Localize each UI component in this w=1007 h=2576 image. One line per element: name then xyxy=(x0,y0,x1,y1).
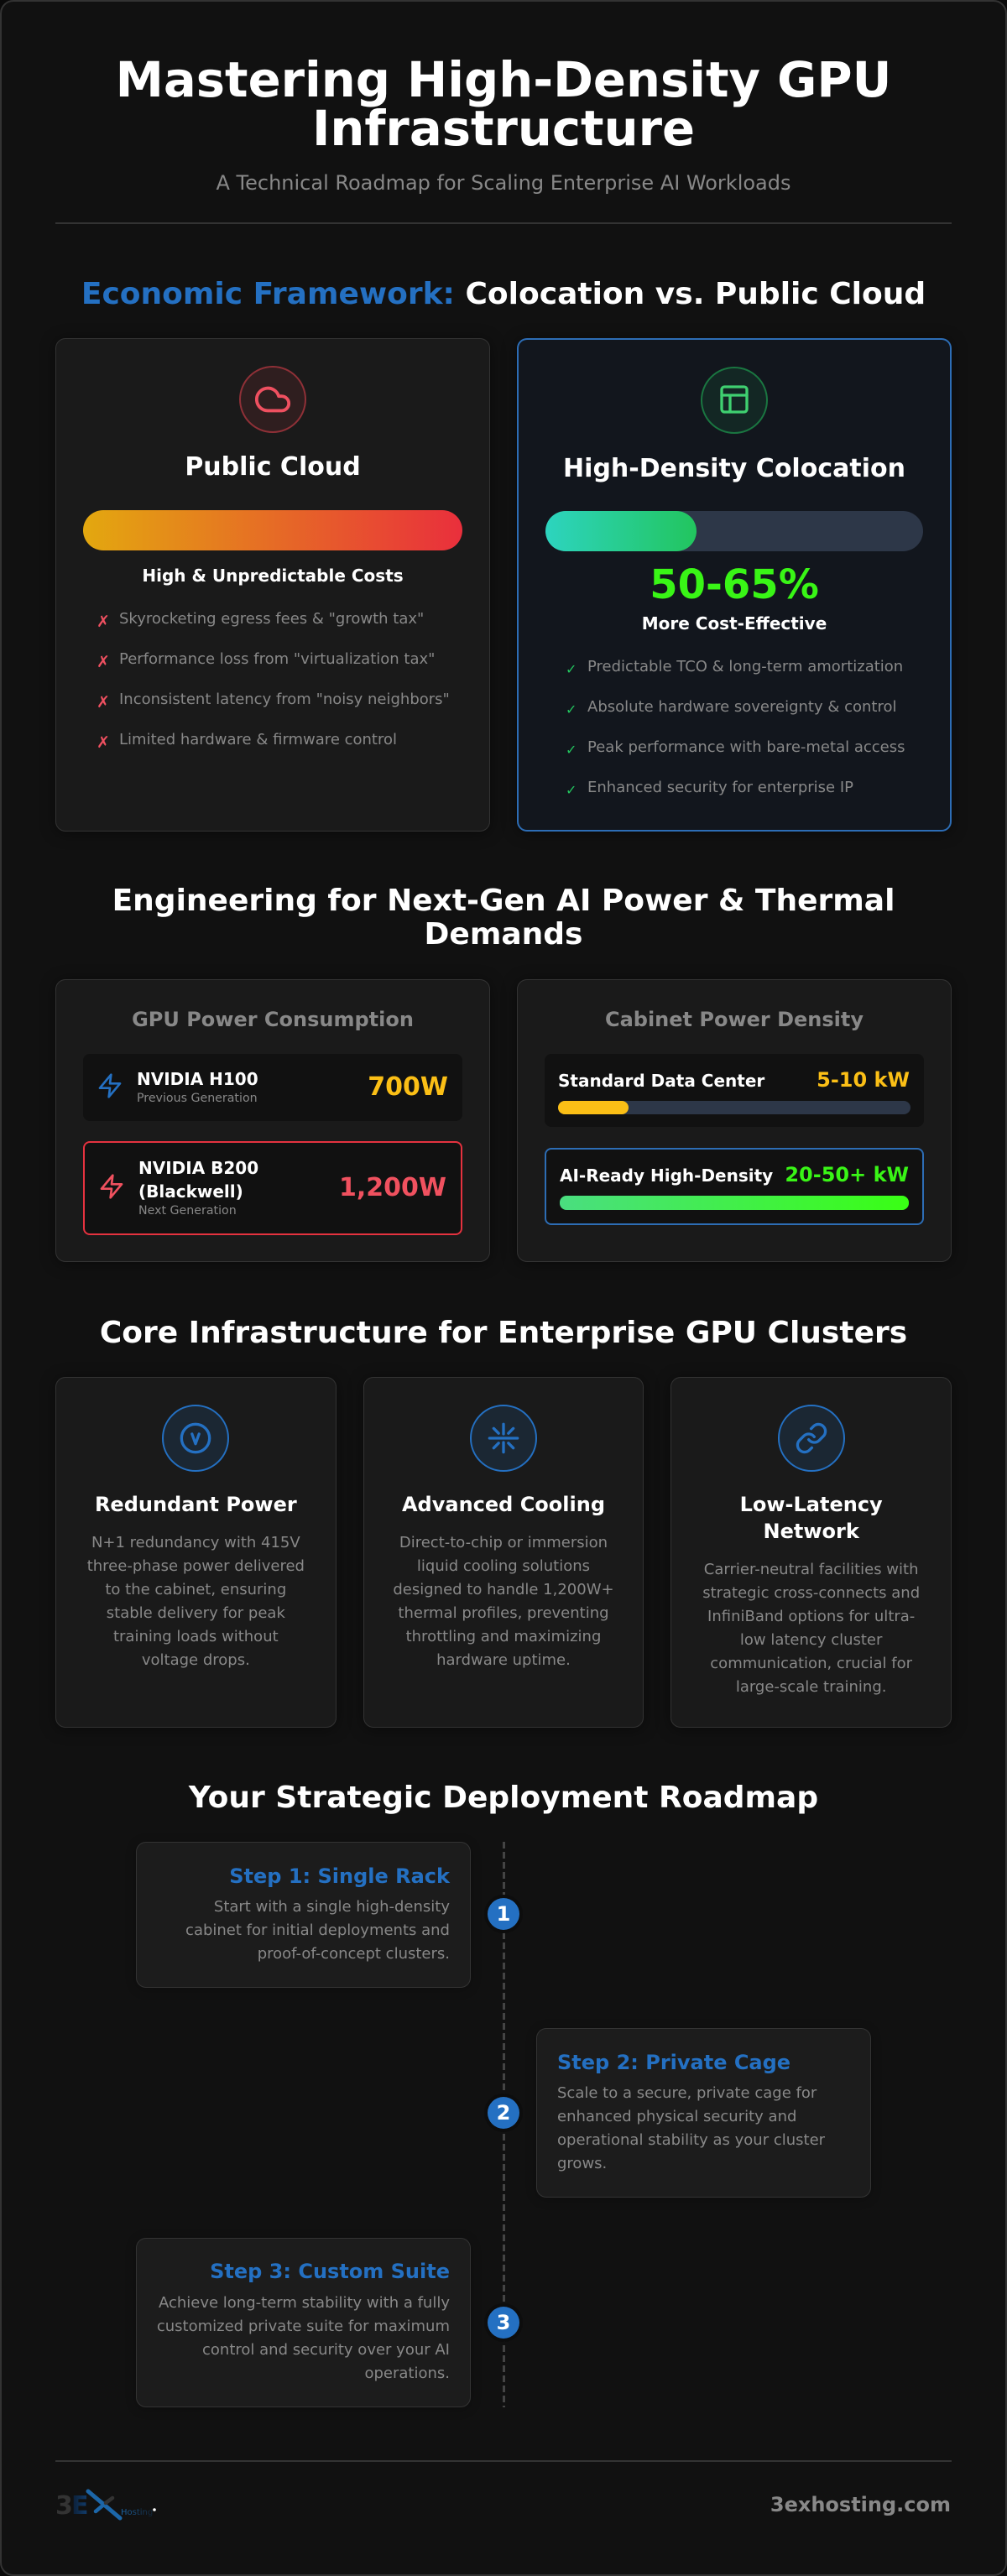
icon: cloud xyxy=(239,366,306,433)
list: cloud drawbacks: Performance loss from "virtualization tax" xyxy=(119,650,435,668)
step 3 text: customized private suite for maximum xyxy=(157,2318,450,2335)
panel: advanced cooling xyxy=(363,1377,644,1728)
text: redundant power: N+1 redundancy with 415V xyxy=(91,1534,300,1551)
icon: red bolt xyxy=(101,1174,123,1199)
list: cloud drawbacks: ✗ xyxy=(97,653,110,671)
text: advanced cooling xyxy=(393,1534,614,1669)
heading: public cloud: Public Cloud xyxy=(185,452,361,482)
icon: link xyxy=(778,1405,845,1472)
text: redundant power: three-phase power delivered xyxy=(87,1557,305,1575)
savings figure: 50-65% xyxy=(650,561,819,608)
step 1 marker xyxy=(488,1898,519,1930)
text: redundant power xyxy=(87,1534,305,1669)
text: low-latency network: InfiniBand options for ultra- xyxy=(707,1608,915,1625)
panel: low-latency network xyxy=(670,1377,952,1728)
text: low-latency network: large-scale training. xyxy=(736,1678,886,1696)
step 2 text: Scale to a secure, private cage for xyxy=(557,2084,817,2102)
heading: low-latency network xyxy=(740,1493,883,1543)
step 3 title: Step 3: Custom Suite xyxy=(210,2260,450,2283)
step 2 card xyxy=(536,2028,871,2198)
panel: high-density colocation xyxy=(517,338,952,832)
timeline line xyxy=(502,1842,505,2407)
heading: power and thermal: Engineering for Next-Gen AI Power & Thermal xyxy=(112,884,895,918)
list: cloud drawbacks xyxy=(97,610,450,752)
text: low-latency network: Carrier-neutral facilities with xyxy=(704,1561,918,1578)
step 2 text xyxy=(557,2084,825,2172)
logo: 3EX Hosting: Hosting xyxy=(121,2508,153,2517)
cost label: High & Unpredictable Costs xyxy=(142,566,404,586)
text: low-latency network: strategic cross-connects and xyxy=(702,1584,920,1602)
heading: redundant power: Redundant Power xyxy=(95,1493,297,1516)
heading: roadmap: Your Strategic Deployment Roadmap xyxy=(189,1781,818,1815)
list: colocation benefits xyxy=(566,658,905,798)
list: cloud drawbacks: ✗ xyxy=(97,693,110,712)
list: colocation benefits: Predictable TCO & long-term amortization xyxy=(587,658,903,675)
heading: cabinet density: Cabinet Power Density xyxy=(605,1008,864,1031)
text: advanced cooling: throttling and maximizing xyxy=(406,1628,601,1645)
step 2 title: Step 2: Private Cage xyxy=(557,2051,790,2074)
b200 generation: Next Generation xyxy=(138,1204,237,1218)
logo: 3EX Hosting: E xyxy=(71,2491,89,2521)
heading: power and thermal: Demands xyxy=(425,917,582,952)
b200 wattage: 1,200W xyxy=(339,1173,446,1202)
step 2 marker xyxy=(488,2097,519,2129)
step 3 card xyxy=(136,2238,471,2407)
step 1 marker: 1 xyxy=(497,1902,510,1926)
list: colocation benefits: Peak performance with bare-metal access xyxy=(587,738,905,756)
text: low-latency network xyxy=(702,1561,920,1696)
heading: gpu power: GPU Power Consumption xyxy=(132,1008,414,1031)
step 3 marker: 3 xyxy=(497,2311,510,2334)
text: low-latency network: low latency cluster xyxy=(740,1631,882,1649)
logo: 3EX Hosting: 3 xyxy=(55,2491,73,2521)
row: ai-ready high-density xyxy=(545,1148,924,1225)
b200 name xyxy=(138,1158,258,1202)
list: colocation benefits: ✓ xyxy=(566,661,577,677)
icon: blue bolt xyxy=(99,1073,121,1098)
text: advanced cooling: hardware uptime. xyxy=(436,1651,571,1669)
ai-ready bar xyxy=(560,1196,909,1210)
step 2 marker: 2 xyxy=(497,2101,510,2125)
text: advanced cooling: Direct-to-chip or immersion xyxy=(399,1534,608,1551)
text: redundant power: to the cabinet, ensuring xyxy=(105,1581,286,1598)
list: cloud drawbacks: ✗ xyxy=(97,733,110,752)
list: colocation benefits: Absolute hardware sovereignty & control xyxy=(587,698,897,716)
savings label: More Cost-Effective xyxy=(642,613,827,634)
row: nvidia b200 xyxy=(83,1141,462,1235)
cost bar xyxy=(83,510,462,550)
icon: cooling xyxy=(470,1405,537,1472)
h100 generation: Previous Generation xyxy=(137,1092,258,1105)
heading: power and thermal xyxy=(112,884,895,952)
ai-ready label: AI-Ready High-Density xyxy=(560,1165,773,1186)
text: advanced cooling: designed to handle 1,200W+ xyxy=(393,1581,614,1598)
step 1 title: Step 1: Single Rack xyxy=(229,1864,450,1888)
step 1 text: cabinet for initial deployments and xyxy=(185,1922,450,1939)
step 2 text: operational stability as your cluster xyxy=(557,2131,825,2149)
step 3 text: control and security over your AI xyxy=(202,2341,450,2359)
list: colocation benefits: ✓ xyxy=(566,742,577,758)
step 3 marker xyxy=(488,2307,519,2339)
list: cloud drawbacks: Skyrocketing egress fees & "growth tax" xyxy=(119,610,424,628)
row: standard data center xyxy=(545,1054,924,1127)
heading: low-latency network: Network xyxy=(764,1520,859,1543)
title xyxy=(116,52,891,157)
step 3 text: operations. xyxy=(364,2365,450,2382)
step 1 card xyxy=(136,1842,471,1988)
heading: economic framework: Economic Framework: Colocation vs. Public Cloud xyxy=(81,277,926,311)
heading: low-latency network: Low-Latency xyxy=(740,1493,883,1516)
step 3 text: Achieve long-term stability with a fully xyxy=(159,2294,450,2312)
h100 name: NVIDIA H100 xyxy=(137,1069,258,1089)
b200 name: (Blackwell) xyxy=(138,1181,243,1202)
panel: redundant power xyxy=(55,1377,337,1728)
step 1 text xyxy=(185,1898,450,1963)
icon: power xyxy=(162,1405,229,1472)
step 3 text xyxy=(157,2294,450,2382)
savings bar xyxy=(545,511,923,551)
standard value: 5-10 kW xyxy=(817,1068,910,1092)
list: cloud drawbacks: Inconsistent latency from "noisy neighbors" xyxy=(119,691,450,708)
b200 name: NVIDIA B200 xyxy=(138,1158,258,1178)
text: advanced cooling: liquid cooling solutions xyxy=(417,1557,590,1575)
heading: colocation: High-Density Colocation xyxy=(563,454,905,483)
step 1 text: Start with a single high-density xyxy=(214,1898,450,1916)
ai-ready value: 20-50+ kW xyxy=(785,1163,909,1186)
text: redundant power: stable delivery for peak xyxy=(107,1604,285,1622)
text: advanced cooling: thermal profiles, preventing xyxy=(398,1604,609,1622)
title: Mastering High-Density GPU xyxy=(116,52,891,108)
panel: gpu power consumption xyxy=(55,979,490,1262)
list: cloud drawbacks: Limited hardware & firmware control xyxy=(119,731,397,748)
title: Infrastructure xyxy=(312,101,695,157)
heading: core infrastructure: Core Infrastructure for Enterprise GPU Clusters xyxy=(100,1316,907,1350)
text: low-latency network: communication, crucial for xyxy=(710,1655,912,1672)
icon: layout xyxy=(701,367,768,434)
footer url: 3exhosting.com xyxy=(770,2493,951,2516)
text: redundant power: voltage drops. xyxy=(142,1651,250,1669)
standard bar xyxy=(558,1101,910,1114)
h100 wattage: 700W xyxy=(368,1072,448,1102)
step 1 text: proof-of-concept clusters. xyxy=(258,1945,450,1963)
panel: cabinet power density xyxy=(517,979,952,1262)
text: redundant power: training loads without xyxy=(113,1628,279,1645)
row: nvidia h100 xyxy=(83,1054,462,1121)
list: cloud drawbacks: ✗ xyxy=(97,613,110,631)
list: colocation benefits: Enhanced security for enterprise IP xyxy=(587,779,853,796)
standard label: Standard Data Center xyxy=(558,1071,764,1091)
list: colocation benefits: ✓ xyxy=(566,782,577,798)
heading: advanced cooling: Advanced Cooling xyxy=(402,1493,605,1516)
panel: public cloud xyxy=(55,338,490,832)
logo: 3EX Hosting xyxy=(55,2489,156,2521)
step 2 text: enhanced physical security and xyxy=(557,2108,796,2125)
step 2 text: grows. xyxy=(557,2155,607,2172)
list: colocation benefits: ✓ xyxy=(566,701,577,717)
subtitle: A Technical Roadmap for Scaling Enterprise AI Workloads xyxy=(216,171,790,195)
